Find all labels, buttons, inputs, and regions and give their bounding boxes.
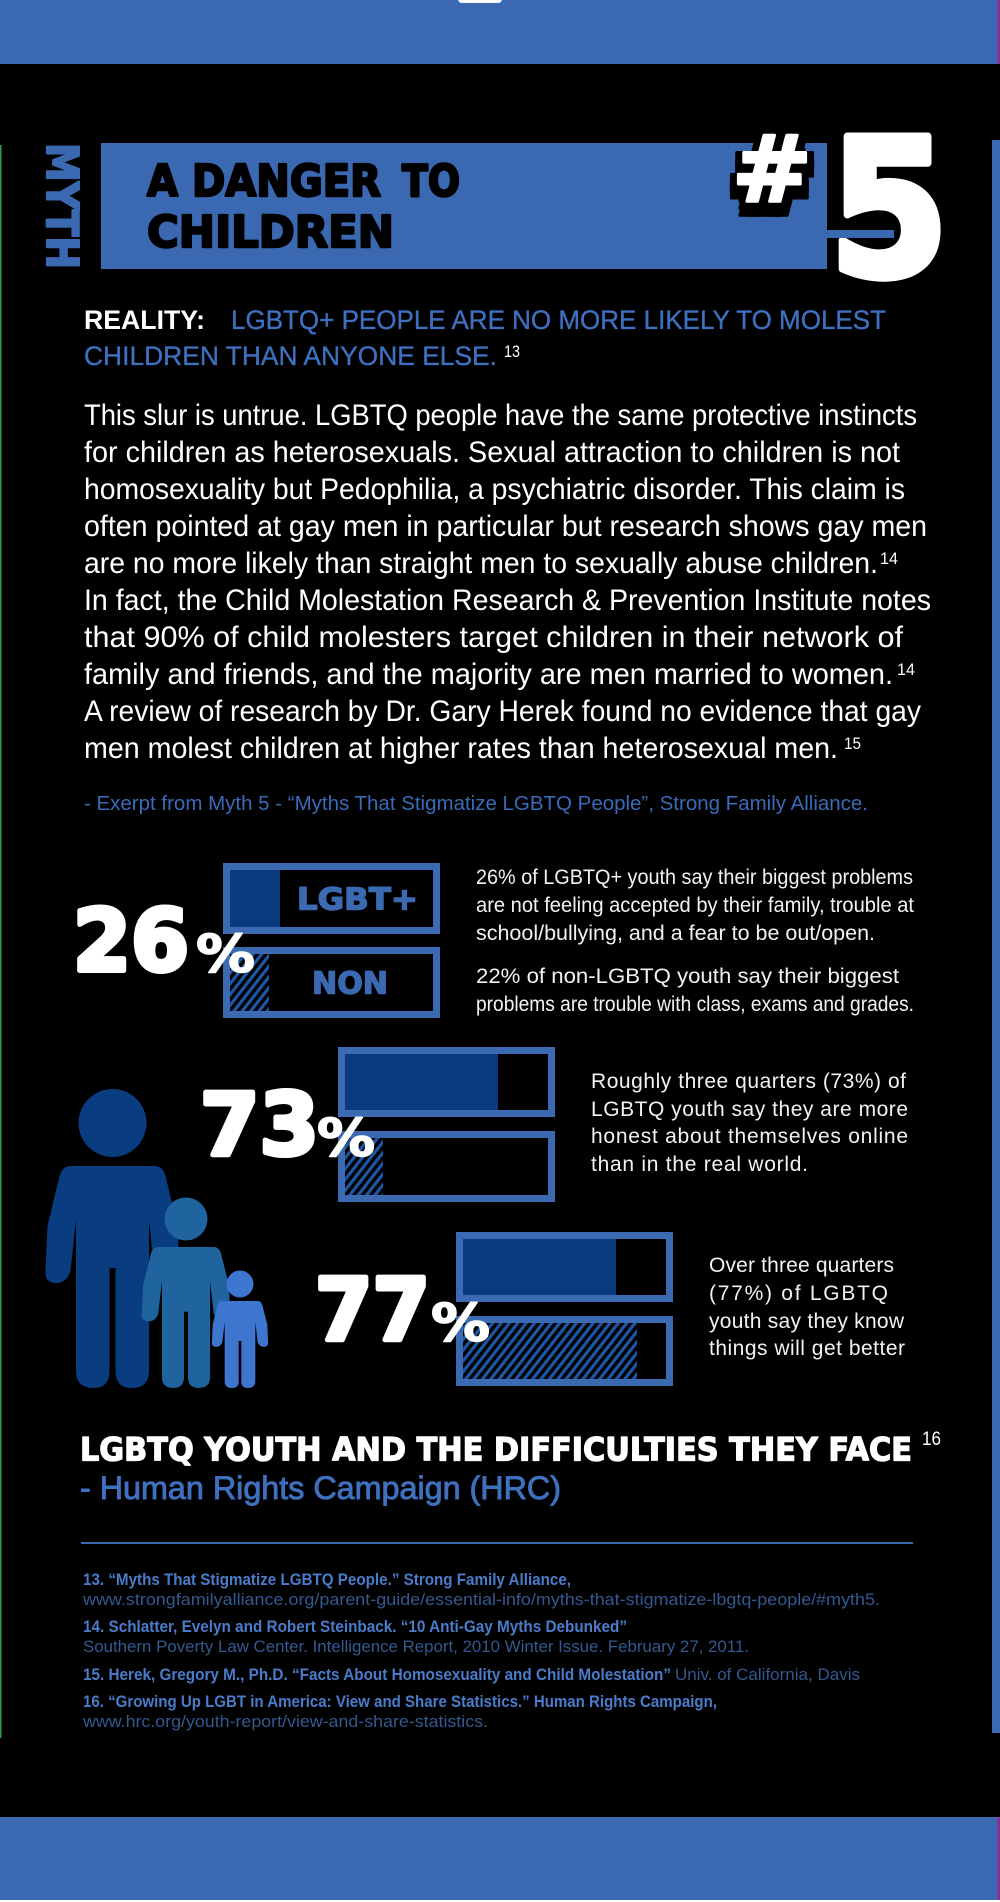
stat: 26%: % xyxy=(196,925,255,985)
heading: youth difficulties: LGBTQ YOUTH AND THE DIFFICULTIES THEY FACE xyxy=(80,1430,912,1468)
references: www.strongfamilyalliance.org/parent-guide/essential-info/myths-that-stigmatize-lbgtq-people/#myth5. xyxy=(82,1590,880,1609)
stat: 73% xyxy=(200,1076,375,1176)
stat: 77%: % xyxy=(431,1294,490,1354)
text: 77% finding: Over three quarters xyxy=(709,1254,894,1277)
text: 73% finding: than in the real world. xyxy=(591,1153,808,1176)
body text: men molest children at higher rates than heterosexual men. xyxy=(84,732,838,765)
stat: 73%: 73 xyxy=(200,1076,319,1176)
text: 26% and 22% findings: 26% of LGBTQ+ youth say their biggest problems xyxy=(476,866,913,889)
stat: 26%: 26 xyxy=(73,892,189,992)
badge: #5: 5 xyxy=(829,99,949,320)
references: 16. “Growing Up LGBT in America: View and Share Statistics.” Human Rights Campaign, xyxy=(83,1692,717,1711)
reality statement: LGBTQ+ PEOPLE ARE NO MORE LIKELY TO MOLEST xyxy=(231,305,886,335)
body text: are no more likely than straight men to sexually abuse children. xyxy=(84,547,878,580)
body text: family and friends, and the majority are men married to women. xyxy=(84,658,893,691)
text: 73% finding xyxy=(591,1070,908,1176)
subheading: source: - Human Rights Campaign (HRC) xyxy=(80,1470,561,1506)
reality statement: REALITY: xyxy=(84,305,205,335)
divider xyxy=(81,1542,913,1544)
body text: A review of research by Dr. Gary Herek found no evidence that gay xyxy=(84,695,921,728)
bar: 77% top xyxy=(460,1236,670,1298)
text: 73% finding: Roughly three quarters (73%) of xyxy=(591,1070,906,1093)
text: 26% and 22% findings: school/bullying, and a fear to be out/open. xyxy=(476,922,875,945)
reality statement xyxy=(84,305,886,371)
child xyxy=(212,1270,268,1388)
text: 26% and 22% findings xyxy=(476,866,914,1016)
body text xyxy=(84,399,931,765)
side strip: left xyxy=(0,145,2,1738)
excerpt credit: - Exerpt from Myth 5 - “Myths That Stigmatize LGBTQ People”, Strong Family Alliance. xyxy=(84,793,868,815)
body text: that 90% of child molesters target children in their network of xyxy=(84,621,904,654)
stat: 77% xyxy=(315,1260,490,1360)
text: 26% and 22% findings: problems are trouble with class, exams and grades. xyxy=(476,993,914,1016)
body text: This slur is untrue. LGBTQ people have the same protective instincts xyxy=(84,399,917,432)
references: 15. Herek, Gregory M., Ph.D. “Facts About Homosexuality and Child Molestation” xyxy=(83,1665,671,1684)
stat: 26% xyxy=(73,892,255,992)
bar: LGBT+ 26%: LGBT+ xyxy=(297,882,418,918)
body text: for children as heterosexuals. Sexual attraction to children is not xyxy=(84,436,901,469)
text: 26% and 22% findings: are not feeling accepted by their family, trouble at xyxy=(476,894,914,917)
body text: often pointed at gay men in particular but research shows gay men xyxy=(84,510,927,543)
body text: In fact, the Child Molestation Research & Prevention Institute notes xyxy=(84,584,931,617)
bar: 73% top xyxy=(342,1050,552,1114)
body text: homosexuality but Pedophilia, a psychiatric disorder. This claim is xyxy=(84,473,905,506)
body text: 14 xyxy=(897,660,915,679)
badge: #5: # xyxy=(732,116,812,223)
label: MYTH: MYTH xyxy=(36,143,87,269)
stat: 73%: % xyxy=(317,1109,375,1169)
title: A DANGER xyxy=(147,156,381,207)
text: 77% finding: things will get better xyxy=(709,1337,905,1360)
bar: 73% bottom xyxy=(342,1134,552,1198)
reality statement: 13 xyxy=(504,342,520,361)
banner: myth title xyxy=(101,143,827,269)
text: 77% finding: youth say they know xyxy=(709,1310,905,1333)
side strip: right xyxy=(992,140,1000,1733)
text: 73% finding: LGBTQ youth say they are more xyxy=(591,1098,908,1121)
text: 26% and 22% findings: 22% of non-LGBTQ youth say their biggest xyxy=(476,965,899,988)
references: 13. “Myths That Stigmatize LGBTQ People.” Strong Family Alliance, xyxy=(83,1570,571,1589)
stat: 77%: 77 xyxy=(315,1260,430,1360)
references xyxy=(82,1570,880,1731)
heading: youth difficulties: 16 xyxy=(922,1429,941,1450)
adult xyxy=(45,1089,180,1388)
text: 77% finding xyxy=(709,1254,905,1360)
icon: family silhouettes xyxy=(45,1089,268,1388)
bar: NON 22% xyxy=(226,950,436,1014)
references: 14. Schlatter, Evelyn and Robert Steinback. “10 Anti-Gay Myths Debunked” xyxy=(83,1617,627,1636)
references: Southern Poverty Law Center. Intelligence Report, 2010 Winter Issue. February 27, 2011. xyxy=(83,1637,749,1656)
title xyxy=(147,156,460,258)
references: www.hrc.org/youth-report/view-and-share-statistics. xyxy=(82,1712,488,1731)
teen xyxy=(142,1198,230,1388)
badge: #5 xyxy=(732,99,949,320)
top band xyxy=(0,0,1000,64)
bar: 77% bottom xyxy=(460,1320,670,1382)
body text: 14 xyxy=(880,549,898,568)
text: 77% finding: (77%) of LGBTQ xyxy=(709,1282,888,1305)
bar: LGBT+ 26% xyxy=(226,866,436,930)
text: 73% finding: honest about themselves online xyxy=(591,1125,908,1148)
title: TO xyxy=(402,156,460,207)
bar: NON 22%: NON xyxy=(312,966,388,1002)
reality statement: CHILDREN THAN ANYONE ELSE. xyxy=(84,341,497,371)
bottom band xyxy=(0,1817,1000,1902)
references: Univ. of California, Davis xyxy=(675,1665,860,1684)
body text: 15 xyxy=(844,734,861,753)
title: CHILDREN xyxy=(147,207,394,258)
